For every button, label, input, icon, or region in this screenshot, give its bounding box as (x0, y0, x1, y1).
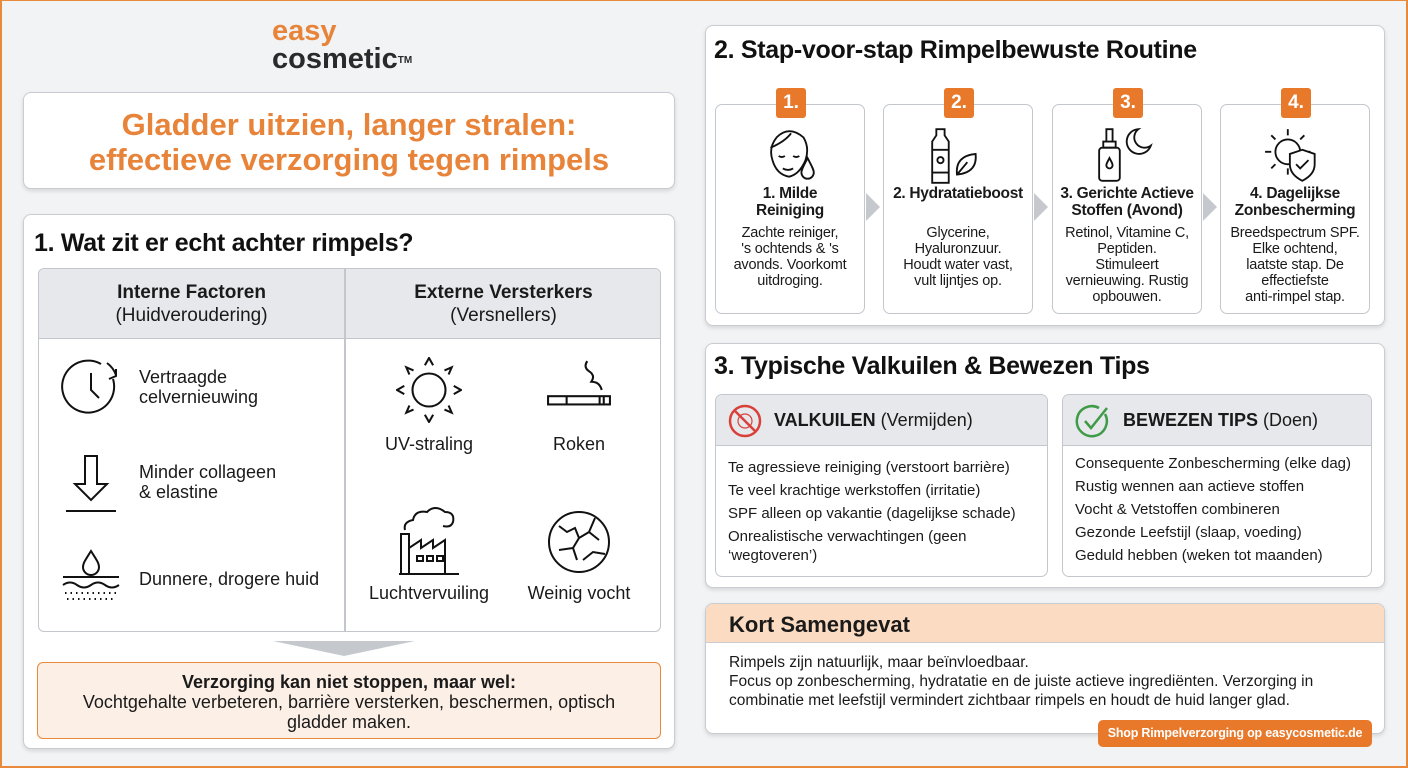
item: smoking (547, 360, 611, 454)
callout (37, 662, 661, 739)
item: factory: Luchtvervuiling (369, 583, 489, 603)
arrow (1034, 193, 1048, 221)
step 2: Glycerine, (926, 225, 990, 241)
logo: easy (272, 15, 337, 47)
step 3: Stimuleert (1095, 257, 1159, 273)
step 2: Hyaluronzuur. (915, 241, 1001, 257)
summary text: Rimpels zijn natuurlijk, maar beïnvloedbaar. (729, 654, 1029, 671)
panel: routine (705, 25, 1385, 326)
callout: Verzorging kan niet stoppen, maar wel: (182, 672, 516, 692)
item: dry (528, 511, 630, 603)
step 4: effectiefste (1261, 273, 1329, 289)
arrow: down triangle (273, 641, 415, 656)
callout: Vochtgehalte verbeteren, barrière versterken, beschermen, optisch (83, 692, 615, 712)
box: valkuilen: Onrealistische verwachtingen (geen (728, 528, 966, 545)
item: dry: Weinig vocht (528, 583, 630, 603)
item: smoking: Roken (553, 434, 605, 454)
item: factory (369, 507, 489, 603)
step 4: anti-rimpel stap. (1245, 289, 1345, 305)
step 2: Houdt water vast, (903, 257, 1013, 273)
step 1: 1. Milde (763, 185, 817, 202)
item: skin (62, 549, 319, 600)
step 2 (883, 104, 1033, 314)
item: arrow down: Minder collageen (139, 462, 276, 482)
heading 1: 1. Wat zit er echt achter rimpels? (34, 229, 413, 257)
step 4 (1220, 104, 1370, 314)
header: externe (414, 282, 593, 326)
title box: effectieve verzorging tegen rimpels (89, 142, 609, 177)
step 4: Elke ochtend, (1252, 241, 1338, 257)
box: tips: Geduld hebben (weken tot maanden) (1075, 547, 1323, 564)
step 1 (715, 104, 865, 314)
header: externe: Externe Versterkers (414, 282, 593, 303)
item: arrow down: & elastine (139, 482, 218, 502)
text: 4. (1288, 92, 1304, 113)
button: shop: Shop Rimpelverzorging op easycosmetic.de (1108, 726, 1362, 740)
step 3: vernieuwing. Rustig (1066, 273, 1188, 289)
step 3: Retinol, Vitamine C, (1065, 225, 1189, 241)
title box (23, 92, 675, 189)
step 3: Peptiden. (1097, 241, 1157, 257)
box: tips: Rustig wennen aan actieve stoffen (1075, 478, 1304, 495)
heading 2: 2. Stap-voor-stap Rimpelbewuste Routine (714, 36, 1197, 64)
text: 1. (783, 92, 799, 113)
text: 2. (951, 92, 967, 113)
summary text: Focus op zonbescherming, hydratatie en de juiste actieve ingrediënten. Verzorging in (729, 673, 1313, 690)
callout: gladder maken. (287, 712, 411, 732)
panel: pitfalls & tips (705, 343, 1385, 588)
box: valkuilen (715, 394, 1048, 577)
step 1: avonds. Voorkomt (734, 257, 846, 273)
table (38, 268, 661, 632)
step 3: opbouwen. (1092, 289, 1162, 305)
logo (272, 15, 412, 75)
item: clock (61, 360, 258, 414)
box: valkuilen: Te agressieve reiniging (verstoort barrière) (728, 459, 1010, 476)
step 4: 4. Dagelijkse (1250, 185, 1340, 202)
item: clock: Vertraagde (139, 367, 227, 387)
heading 3: 3. Typische Valkuilen & Bewezen Tips (714, 352, 1150, 380)
box: valkuilen: Te veel krachtige werkstoffen (irritatie) (728, 482, 980, 499)
step 3 (1052, 104, 1202, 314)
summary text (729, 654, 1313, 709)
step 3: 3. Gerichte Actieve (1060, 185, 1194, 202)
box: valkuilen: VALKUILEN (Vermijden) (774, 410, 973, 430)
step 3: Stoffen (Avond) (1071, 202, 1183, 219)
step 1: Reiniging (756, 202, 824, 219)
step 1: uitdroging. (757, 273, 823, 289)
arrow (1203, 193, 1217, 221)
item: arrow down (66, 455, 276, 512)
item: clock: celvernieuwing (139, 387, 258, 407)
box: tips: Vocht & Vetstoffen combineren (1075, 501, 1280, 518)
box: valkuilen: SPF alleen op vakantie (dagelijkse schade) (728, 505, 1016, 522)
summary heading: Kort Samengevat (729, 612, 910, 637)
step 2: 2. Hydratatieboost (893, 185, 1023, 202)
step 2: vult lijntjes op. (914, 273, 1002, 289)
item: UV (385, 357, 473, 454)
summary text: combinatie met leefstijl vermindert zichtbaar rimpels en houdt de huid langer glad. (729, 692, 1290, 709)
header: interne: (Huidveroudering) (115, 305, 268, 326)
step 4: laatste stap. De (1246, 257, 1344, 273)
step 4: Breedspectrum SPF. (1230, 225, 1360, 241)
panel: causes (23, 214, 675, 749)
box: tips (1062, 394, 1372, 577)
header: interne: Interne Factoren (117, 282, 266, 303)
item: UV: UV-straling (385, 434, 473, 454)
box: valkuilen: ‘wegtoveren’) (728, 547, 817, 564)
header: interne (115, 282, 268, 326)
step 1: 's ochtends & 's (741, 241, 839, 257)
button: shop (1098, 720, 1372, 747)
box: tips: Consequente Zonbescherming (elke dag) (1075, 455, 1351, 472)
text: 3. (1120, 92, 1136, 113)
title box: Gladder uitzien, langer stralen: (122, 107, 576, 142)
item: skin: Dunnere, drogere huid (139, 569, 319, 589)
logo: cosmeticTM (272, 43, 412, 75)
arrow (866, 193, 880, 221)
box: tips: Gezonde Leefstijl (slaap, voeding) (1075, 524, 1302, 541)
header: externe: (Versnellers) (450, 305, 557, 326)
summary heading (706, 604, 1384, 643)
step 1: Zachte reiniger, (742, 225, 838, 241)
step 4: Zonbescherming (1235, 202, 1355, 219)
box: tips: BEWEZEN TIPS (Doen) (1123, 410, 1318, 430)
panel: summary (705, 603, 1385, 734)
